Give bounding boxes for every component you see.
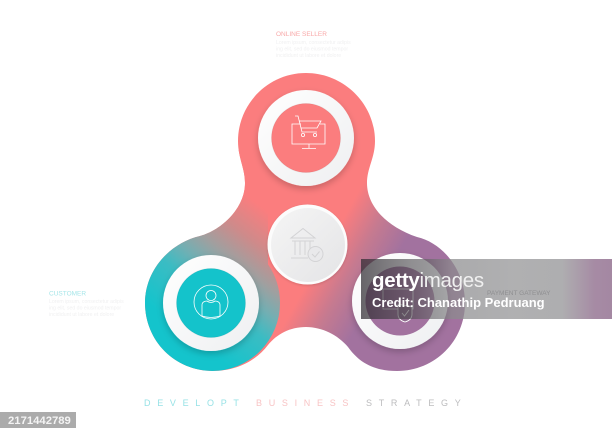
- icon: person in circle: [194, 285, 228, 319]
- text block: customer: [49, 290, 124, 318]
- icon: certificate with shield: [383, 289, 413, 322]
- top node: online seller: [258, 90, 354, 186]
- image id tag: [0, 412, 76, 428]
- centre node: bank: [268, 204, 348, 284]
- text block: online seller: Lorem ipsum, consectetur adipis: [276, 40, 351, 46]
- left node: customer: [163, 255, 259, 351]
- icon: shopping cart on monitor: [292, 116, 325, 148]
- right node: payment gateway: [352, 253, 448, 349]
- title: STRATEGY: [366, 398, 467, 408]
- text block: online seller: ONLINE SELLER: [276, 31, 327, 38]
- image id tag: 2171442789: [8, 415, 71, 427]
- title: BUSINESS: [256, 398, 355, 408]
- three-lobed spinner body: [145, 73, 465, 371]
- text block: customer: Lorem ipsum, consectetur adipis: [49, 299, 124, 305]
- text block: online seller: ing elit, sed do eiusmod tempor: [276, 46, 348, 52]
- title: DEVELOPT: [144, 398, 246, 408]
- watermark band: [361, 259, 612, 319]
- text block: customer: CUSTOMER: [49, 290, 86, 298]
- text block: customer: ing elit, sed do eiusmod tempor: [49, 306, 121, 312]
- watermark band: gettyimages: [372, 269, 484, 292]
- title: [144, 398, 467, 408]
- watermark band: Credit: Chanathip Pedruang: [372, 295, 545, 310]
- icon: bank with check badge: [291, 228, 323, 262]
- text block: online seller: incididunt ut labore et dolore: [276, 53, 341, 59]
- text block: customer: incididunt ut labore et dolore: [49, 312, 114, 318]
- text block: online seller: [276, 31, 351, 59]
- watermark band: PAYMENT GATEWAY: [487, 290, 551, 297]
